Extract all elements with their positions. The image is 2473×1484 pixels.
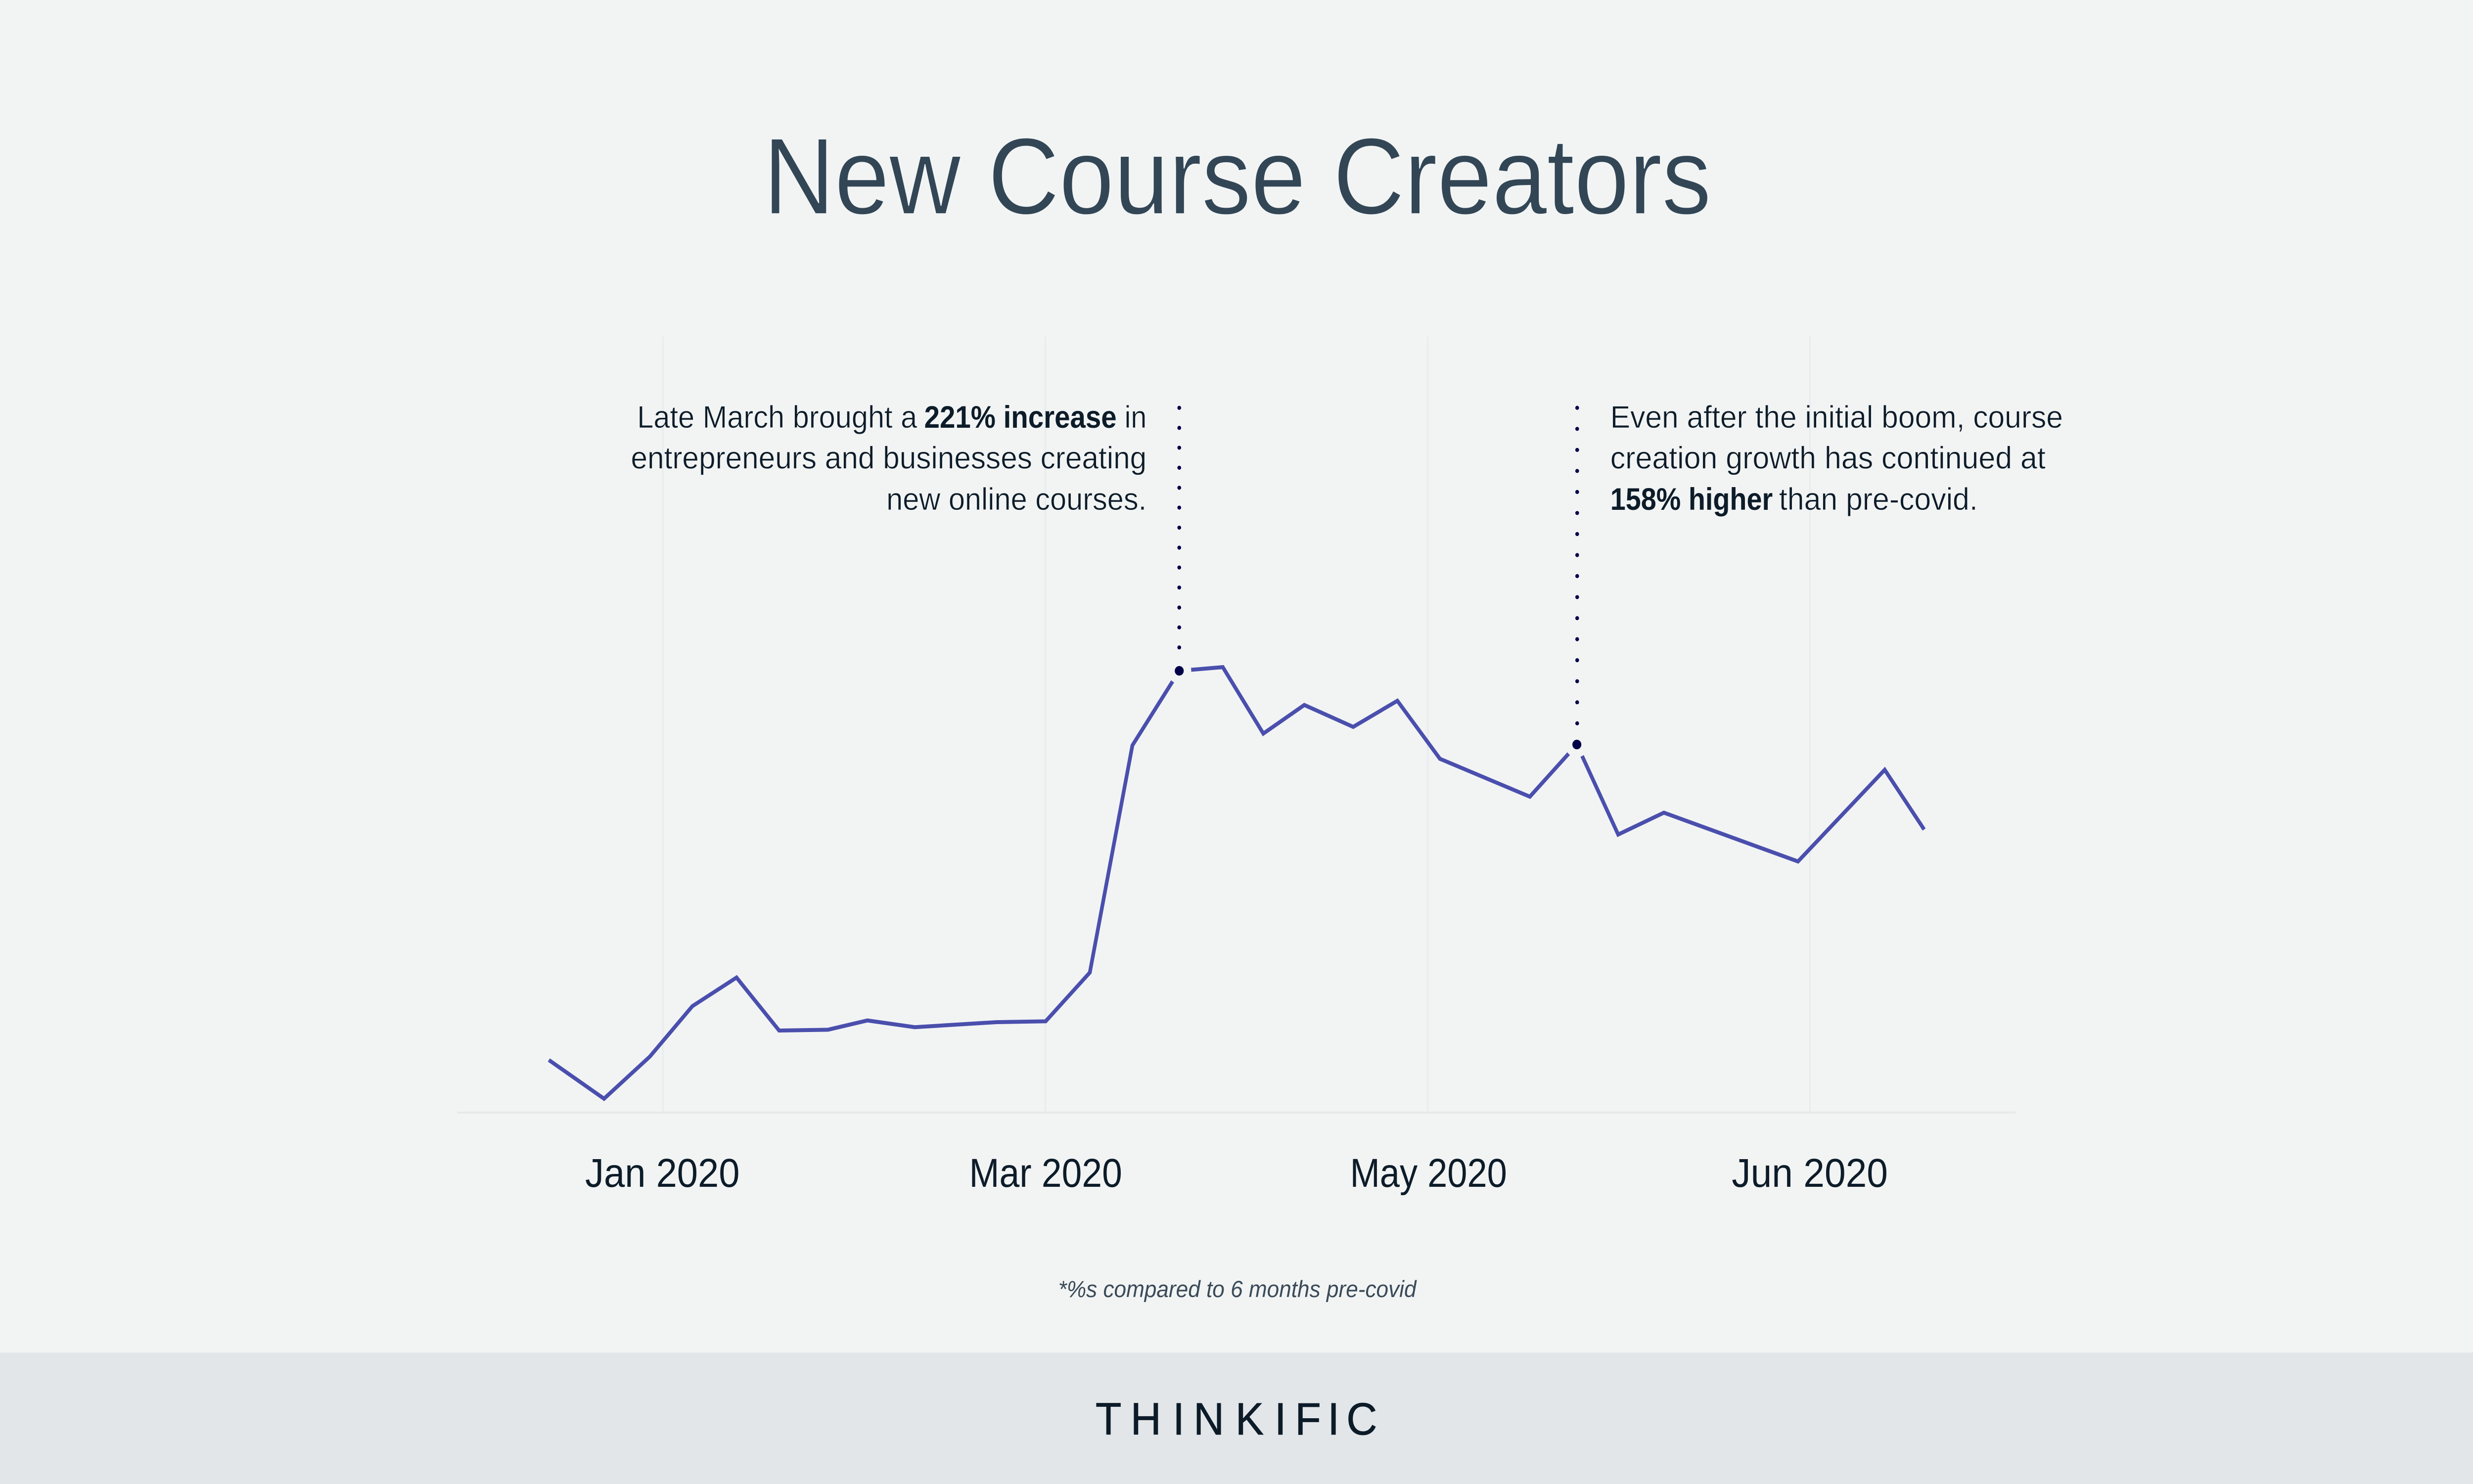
- footnote: *%s compared to 6 months pre-covid: [1058, 1276, 1417, 1302]
- callout: late March increase: entrepreneurs and businesses creating: [631, 441, 1146, 475]
- marker: continued growth: [1565, 406, 1589, 757]
- callout: growth after the initial boom: than pre-covid.: [1779, 482, 1978, 516]
- logo: Thinkific wordmark: THINKIFIC: [1096, 1393, 1377, 1444]
- marker: late March peak: [1167, 406, 1191, 683]
- callout: growth after the initial boom: [1610, 400, 2063, 516]
- title: New Course Creators: [763, 116, 1711, 237]
- x-axis labels: Mar 2020: [969, 1150, 1122, 1196]
- callout: growth after the initial boom: 158% higher: [1610, 482, 1773, 516]
- footer band: [0, 1352, 2473, 1484]
- x-axis labels: May 2020: [1350, 1150, 1507, 1196]
- callout: late March increase: in: [1125, 400, 1146, 434]
- callout: late March increase: Late March brought a: [637, 400, 917, 434]
- callout: late March increase: [631, 400, 1146, 516]
- data line: [549, 667, 1924, 1099]
- callout: growth after the initial boom: creation growth has continued at: [1610, 441, 2046, 475]
- chart: new course creators line chart: [458, 336, 2015, 1196]
- x-axis labels: [585, 1150, 1888, 1196]
- callout: late March increase: new online courses.: [886, 482, 1146, 516]
- callout: growth after the initial boom: Even after the initial boom, course: [1610, 400, 2063, 434]
- callout: late March increase: 221% increase: [924, 400, 1117, 434]
- x-axis labels: Jun 2020: [1732, 1150, 1888, 1196]
- x-axis labels: Jan 2020: [585, 1150, 740, 1196]
